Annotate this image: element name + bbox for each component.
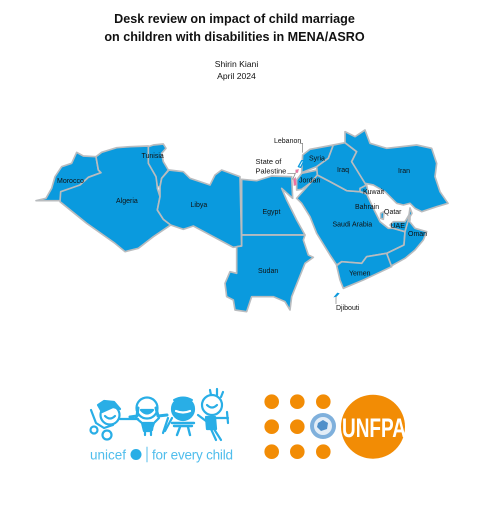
map: MENA/ASRO countries: Egypt xyxy=(262,209,280,216)
title: Desk review on impact of child marriage xyxy=(114,12,355,26)
Kuwait xyxy=(360,185,368,194)
map: MENA/ASRO countries: Qatar xyxy=(384,209,402,216)
map: MENA/ASRO countries: Jordan xyxy=(299,178,321,184)
Saudi Arabia xyxy=(297,175,405,265)
icon: child with raised hand xyxy=(198,389,228,440)
author and date xyxy=(215,59,258,81)
map: MENA/ASRO countries: Iraq xyxy=(337,167,349,174)
Yemen xyxy=(337,253,392,288)
Qatar xyxy=(381,212,384,219)
Tunisia xyxy=(148,144,168,187)
title xyxy=(104,12,365,44)
icon: UN emblem xyxy=(130,449,142,460)
author and date: April 2024 xyxy=(217,71,256,81)
map: MENA/ASRO countries: Oman xyxy=(408,231,427,238)
map: MENA/ASRO countries: Bahrain xyxy=(355,204,379,211)
map: MENA/ASRO countries: Iran xyxy=(398,168,410,175)
icon: smiling girl xyxy=(130,398,168,435)
State of Palestine xyxy=(293,177,297,186)
map: MENA/ASRO countries: Libya xyxy=(190,202,207,209)
icon: child with cane xyxy=(165,398,194,435)
map: MENA/ASRO countries: UAE xyxy=(390,223,405,230)
map: MENA/ASRO countries xyxy=(36,130,448,312)
map: MENA/ASRO countries: Syria xyxy=(309,156,325,162)
Morocco xyxy=(36,152,101,201)
UAE xyxy=(390,213,410,232)
unicef wordmark: unicef xyxy=(90,448,126,462)
map: MENA/ASRO countries: Kuwait xyxy=(363,189,384,196)
map: MENA/ASRO countries: Tunisia xyxy=(142,153,164,160)
map: MENA/ASRO countries: Saudi Arabia xyxy=(332,222,372,228)
map: MENA/ASRO countries: Algeria xyxy=(116,198,138,205)
Jordan xyxy=(297,170,317,190)
author and date: Shirin Kiani xyxy=(215,59,258,69)
Egypt xyxy=(242,176,305,235)
Djibouti xyxy=(333,293,340,297)
Palestine north xyxy=(296,169,299,173)
Iraq xyxy=(317,143,367,194)
icon: UN emblem xyxy=(310,413,336,439)
UNFPA wordmark: UNFPA xyxy=(342,413,406,443)
orange circle xyxy=(341,395,405,459)
logo: unicef for every child xyxy=(90,389,233,462)
Iran xyxy=(345,130,448,212)
map: MENA/ASRO countries: Sudan xyxy=(258,268,278,275)
map: MENA/ASRO countries: Lebanon xyxy=(274,138,301,145)
nine dots xyxy=(264,394,331,459)
icon: child in wheelchair xyxy=(90,401,138,440)
logo: UNFPA xyxy=(264,394,406,459)
Oman xyxy=(387,208,427,267)
Libya xyxy=(157,170,242,247)
Syria xyxy=(302,145,333,173)
title: on children with disabilities in MENA/ASRO xyxy=(104,30,365,44)
Lebanon xyxy=(298,161,304,167)
map: MENA/ASRO countries: Palestine xyxy=(256,166,286,176)
map: MENA/ASRO countries: Djibouti xyxy=(336,305,360,312)
tagline: for every child xyxy=(152,448,233,462)
labels: Morocco xyxy=(57,178,84,185)
Algeria xyxy=(60,146,171,252)
map: MENA/ASRO countries: State of xyxy=(256,157,282,166)
map: MENA/ASRO countries: Yemen xyxy=(349,270,371,278)
Sudan xyxy=(225,235,313,312)
leader lines xyxy=(287,143,336,304)
